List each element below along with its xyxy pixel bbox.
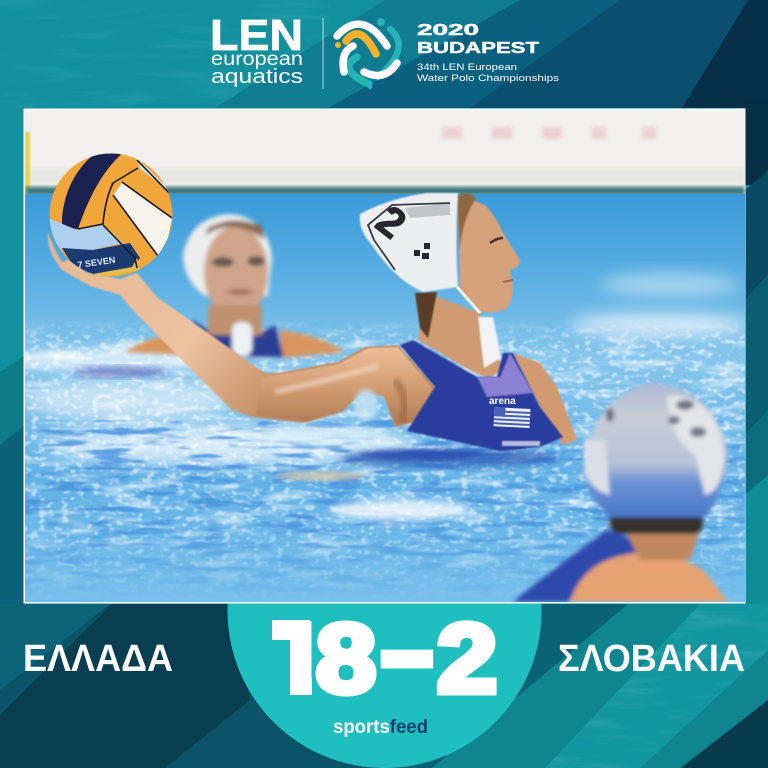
header logo: LEN European Aquatics	[210, 11, 303, 88]
main player body: arena	[489, 396, 516, 407]
background player	[125, 214, 345, 358]
championship title: 34th LEN European	[417, 62, 517, 73]
neck	[418, 293, 505, 378]
championship title: Water Polo Championships	[417, 73, 559, 84]
score	[272, 620, 497, 696]
header logo: LEN European Aquatics: european	[211, 49, 303, 70]
sportsfeed logo: sportsfeed	[333, 717, 428, 738]
face	[458, 198, 520, 313]
championship title: BUDAPEST	[417, 40, 540, 57]
photo: water polo player with ball	[0, 110, 750, 602]
pool wall	[25, 110, 745, 195]
header logo: LEN European Aquatics: aquatics	[211, 66, 303, 88]
hair behind cap	[415, 292, 437, 338]
cap strap	[478, 317, 501, 368]
team: Greece: ΕΛΛΑΔΑ	[23, 638, 173, 680]
championship swirl emblem	[335, 18, 399, 89]
water polo ball	[48, 151, 175, 280]
score circle	[228, 454, 542, 768]
right shoulder	[513, 353, 577, 445]
raised arm and hand	[48, 232, 436, 427]
flag on swimsuit	[493, 407, 530, 428]
main player body	[360, 193, 577, 451]
photo frame	[24, 108, 746, 604]
swim cap	[360, 193, 458, 292]
score: 1	[272, 604, 326, 713]
water splash around arm	[250, 389, 480, 460]
water polo ball: 7 SEVEN	[77, 255, 116, 270]
main player body: 2	[368, 196, 415, 247]
score: 8	[316, 604, 376, 713]
team: Slovakia: ΣΛΟΒΑΚΙΑ	[558, 638, 745, 680]
header logo: LEN European Aquatics: LEN	[210, 11, 303, 60]
foreground player	[513, 382, 728, 602]
water surface	[0, 194, 750, 602]
championship title	[417, 22, 559, 84]
championship title: 2020	[417, 22, 479, 39]
swimsuit	[400, 340, 563, 451]
score: 2	[437, 604, 497, 713]
score: -	[380, 595, 434, 707]
